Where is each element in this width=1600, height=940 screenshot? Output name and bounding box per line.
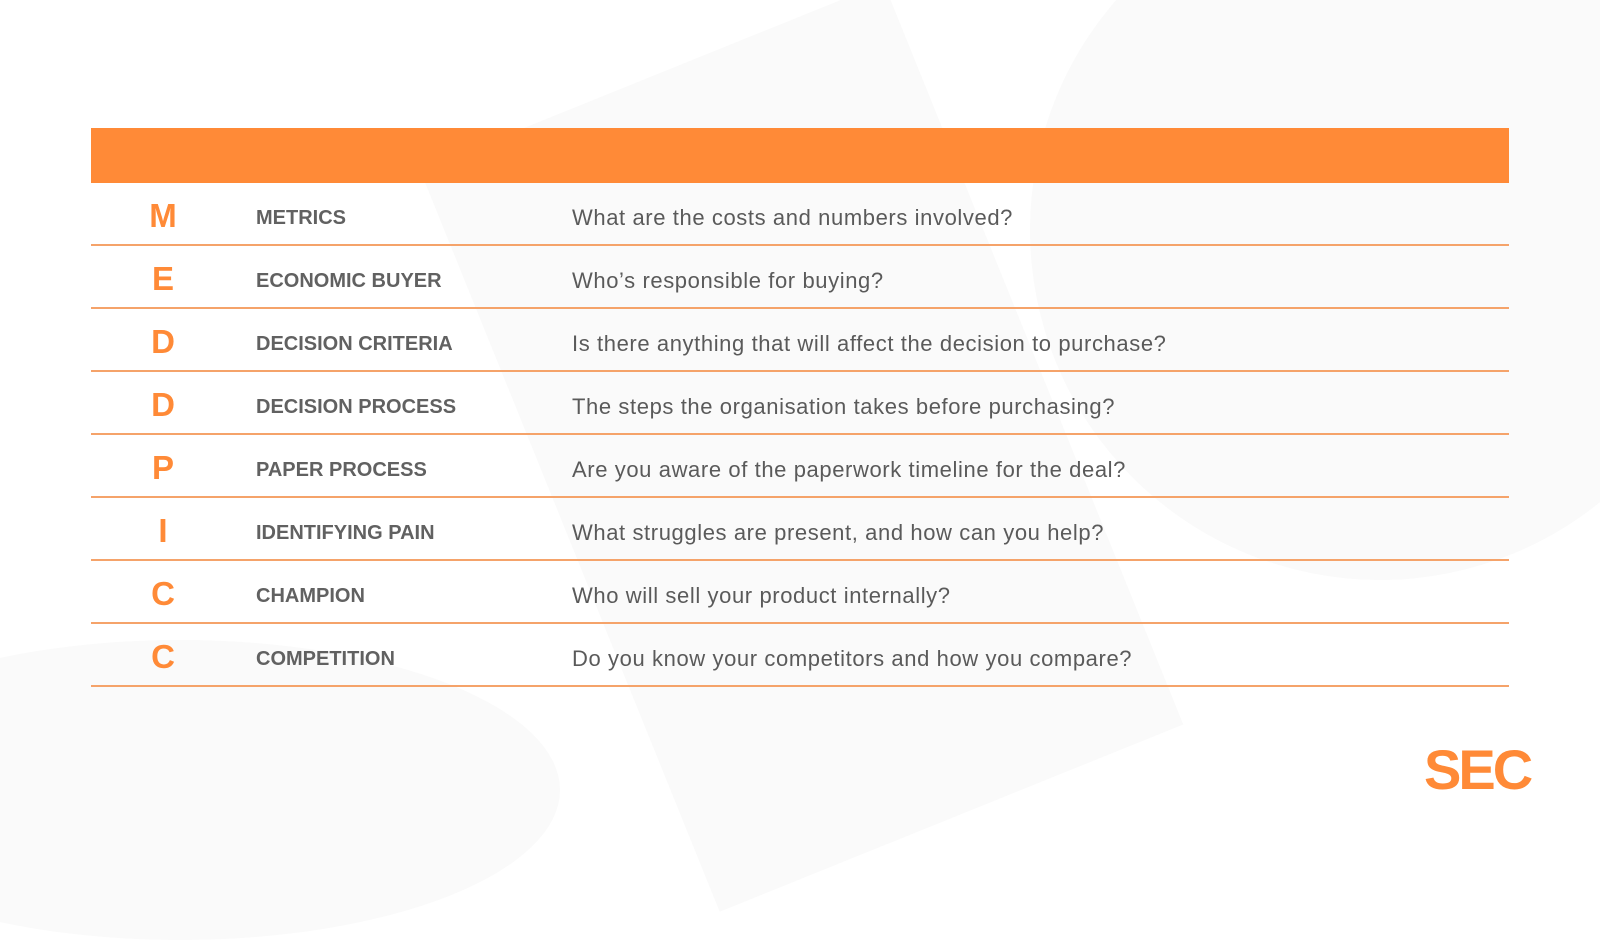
- row: competition: Do you know your competitors and how you compare?: [572, 646, 1132, 671]
- row: economic buyer: E: [152, 260, 174, 297]
- row: economic buyer: [91, 246, 1509, 309]
- row: identifying pain: What struggles are present, and how can you help?: [572, 520, 1104, 545]
- row: champion: Who will sell your product internally?: [572, 583, 951, 608]
- row: identifying pain: I: [158, 512, 168, 549]
- row: decision criteria: DECISION CRITERIA: [256, 333, 453, 355]
- row: metrics: M: [149, 197, 177, 234]
- row: champion: CHAMPION: [256, 585, 365, 607]
- row: identifying pain: IDENTIFYING PAIN: [256, 522, 435, 544]
- row: paper process: Are you aware of the paperwork timeline for the deal?: [572, 457, 1126, 482]
- row: decision criteria: [91, 309, 1509, 372]
- row: decision process: The steps the organisation takes before purchasing?: [572, 394, 1115, 419]
- row: decision process: [91, 372, 1509, 435]
- row: decision criteria: Is there anything that will affect the decision to purchase?: [572, 331, 1166, 356]
- row: competition: C: [151, 638, 175, 675]
- row: competition: COMPETITION: [256, 648, 395, 670]
- row: metrics: What are the costs and numbers involved?: [572, 205, 1013, 230]
- header bar: [91, 128, 1509, 183]
- row: metrics: METRICS: [256, 207, 346, 229]
- row: paper process: [91, 435, 1509, 498]
- row: champion: C: [151, 575, 175, 612]
- row: metrics: [91, 183, 1509, 246]
- row: decision process: D: [151, 386, 175, 423]
- logo: SEC: SEC: [1424, 738, 1530, 801]
- row: decision criteria: D: [151, 323, 175, 360]
- table: MEDDPICC: [91, 197, 1509, 687]
- row: paper process: PAPER PROCESS: [256, 459, 427, 481]
- row: paper process: P: [152, 449, 174, 486]
- row: economic buyer: ECONOMIC BUYER: [256, 270, 442, 292]
- row: champion: [91, 561, 1509, 624]
- row: competition: [91, 624, 1509, 687]
- row: economic buyer: Who’s responsible for buying?: [572, 268, 884, 293]
- row: decision process: DECISION PROCESS: [256, 396, 456, 418]
- row: identifying pain: [91, 498, 1509, 561]
